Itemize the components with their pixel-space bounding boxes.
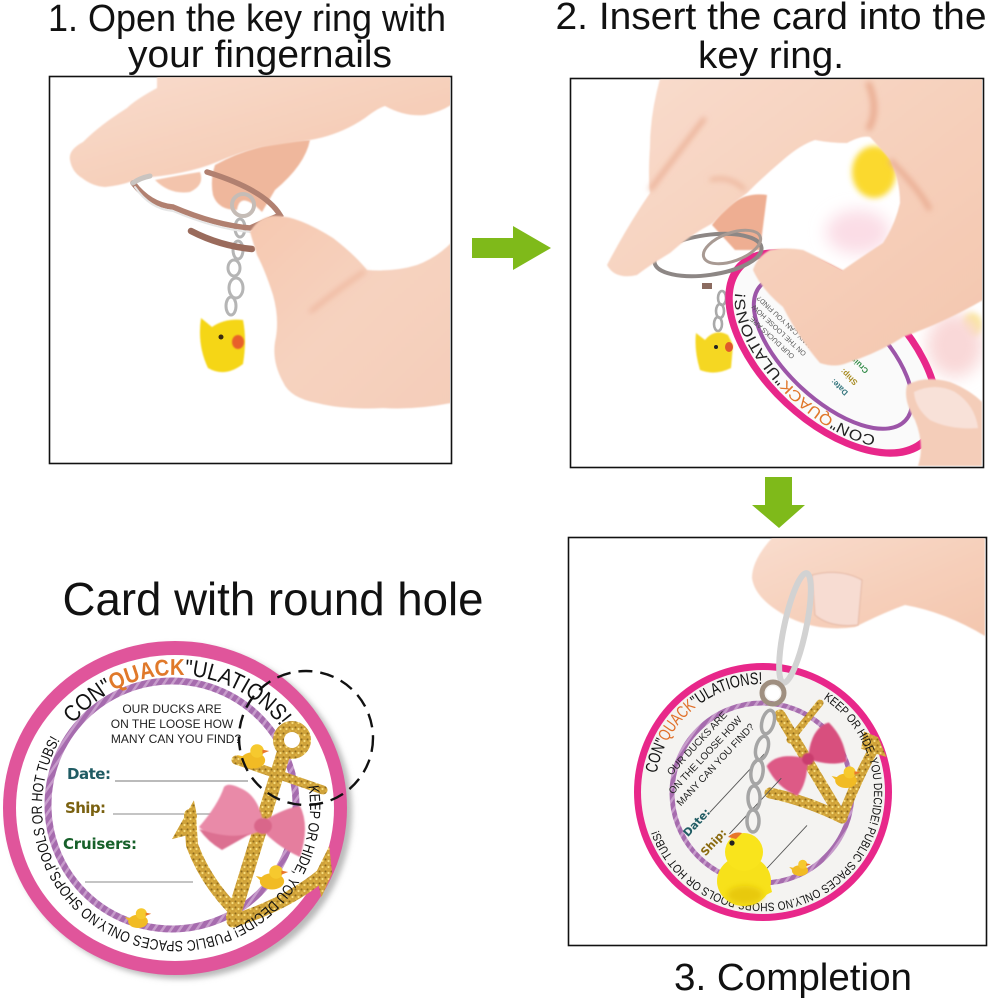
text: card small print: OUR DUCKS ARE	[749, 315, 796, 359]
icon: card shadow	[8, 645, 352, 979]
icon: mini duck	[256, 865, 288, 890]
icon: chain and duck charm	[200, 219, 245, 372]
text: card fields	[832, 358, 868, 396]
text: cruisers field: Cruisers:	[63, 835, 137, 853]
text: ship field: Ship:	[65, 799, 106, 817]
icon: fingernail	[812, 572, 862, 626]
panel: step 2 photo	[570, 78, 984, 468]
text: date field: Date:	[67, 765, 111, 783]
icon: split key ring	[133, 172, 280, 249]
icon: finger shading	[650, 82, 930, 210]
icon: mini duck	[832, 766, 860, 788]
icon: metal eyelet	[762, 682, 784, 704]
text: card border message: KEEP OR HIDE, YOU DECIDE! PUBLIC SPACES ONLY.NO SHOPS,POOLS OR HOT TUBS!	[651, 692, 882, 912]
heading: card with round hole: Card with round hole	[62, 573, 484, 625]
text block: card interior: OUR DUCKS ARE	[665, 710, 730, 778]
caption: step 3: 3. Completion	[674, 957, 912, 999]
heading: step 2: key ring.	[698, 35, 844, 77]
text: card small print: MANY CAN YOU FIND?	[756, 294, 816, 351]
icon: mini duck	[237, 744, 269, 768]
icon: pink bow	[199, 785, 305, 857]
arrow: down	[752, 477, 805, 528]
heading: step 2	[556, 0, 986, 77]
icon: card disc	[3, 641, 347, 975]
text: card fields: Date:	[829, 377, 850, 397]
icon: gold anchor	[176, 726, 330, 921]
text: card prompt: ON THE LOOSE HOW	[111, 717, 234, 731]
icon: rope ring	[48, 681, 296, 929]
icon: mini duck	[789, 860, 811, 876]
icon: upper finger	[70, 77, 451, 187]
text block: card interior	[668, 711, 808, 868]
text: cruisers field	[63, 835, 193, 882]
icon: hand holding ring	[752, 538, 985, 636]
icon: rear fingers	[155, 140, 310, 212]
icon: key ring	[776, 570, 814, 686]
heading: step 1: your fingernails	[128, 34, 392, 76]
icon: round card	[634, 663, 892, 921]
text: card greeting: CON"QUACK"ULATIONS!	[646, 672, 762, 772]
panel: step 3 photo	[568, 536, 988, 946]
text block: card interior: Date:	[681, 806, 713, 839]
icon: lower right finger	[906, 379, 982, 466]
text block: card interior: MANY CAN YOU FIND?	[675, 721, 757, 809]
icon: mini duck	[125, 908, 151, 928]
icon: dashed magnifier circle	[239, 671, 373, 805]
text: card prompt: MANY CAN YOU FIND?	[111, 732, 241, 746]
icon: tilted card	[725, 249, 936, 457]
text: card fields: Cruisers:	[839, 345, 870, 375]
icon: duck charm and chain	[696, 291, 733, 373]
text: card prompt: OUR DUCKS ARE	[122, 702, 222, 716]
heading: step 1	[48, 0, 446, 76]
panel: round card illustration	[3, 641, 374, 982]
icon: gold anchor	[770, 703, 882, 818]
icon: chain	[747, 709, 777, 832]
text: card fields: Ship:	[839, 367, 859, 387]
icon: hand with index finger and thumb	[607, 79, 983, 366]
text: greeting on arc: CON"QUACK"ULATIONS!	[64, 659, 292, 725]
icon: split key ring	[652, 224, 765, 286]
icon: rear finger	[712, 194, 767, 250]
text block: card interior: Ship:	[698, 826, 729, 859]
text: card greeting: CON"QUACK"ULATIONS!	[734, 294, 874, 445]
text: border message on arc: KEEP OR HIDE, YOU DECIDE! PUBLIC SPACES ONLY.NO SHOPS,POOLS OR HOT TUBS!	[32, 736, 320, 952]
text: card prompt	[111, 702, 241, 746]
text block: card interior: ON THE LOOSE HOW	[667, 714, 745, 797]
icon: thumb	[250, 216, 451, 408]
icon: blurred background ducks	[826, 146, 983, 377]
panel: step 1 photo	[50, 76, 452, 464]
icon: yellow duck charm	[717, 832, 772, 906]
text: card small print: ON THE LOOSE HOW	[751, 303, 808, 357]
arrow: right	[472, 226, 551, 270]
icon: pink bow	[766, 722, 847, 796]
icon: thumb crease	[310, 271, 365, 312]
